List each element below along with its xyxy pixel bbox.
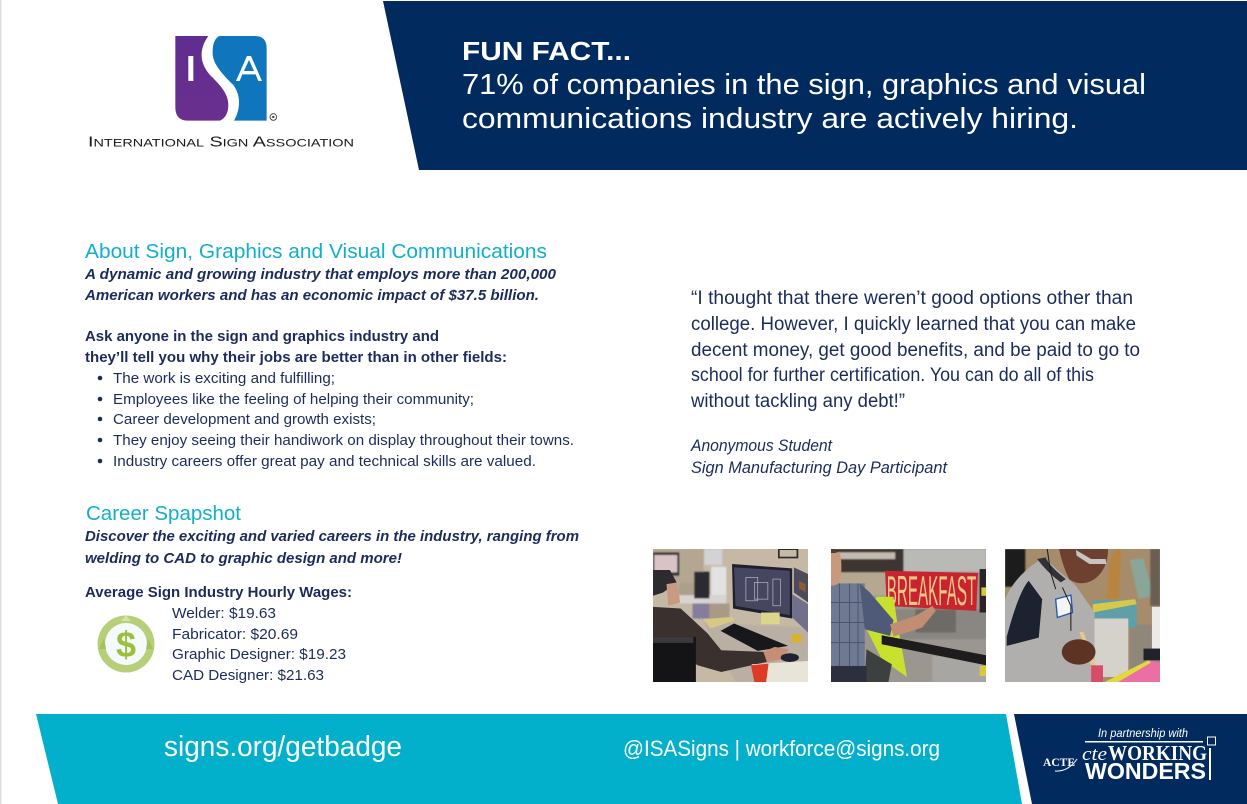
text: career intro (85, 528, 579, 567)
text: career intro: welding to CAD to graphic design and more! (85, 550, 402, 567)
heading: about the industry: About Sign, Graphics and Visual Communications (85, 240, 547, 263)
list: reasons jobs are better: Career development and growth exists; (113, 411, 376, 428)
panel: teal contact footer (36, 714, 1022, 804)
text: BREAKFAST (887, 567, 976, 614)
list: hourly wages by role: Graphic Designer: $19.23 (172, 646, 346, 663)
logo: CTE Working Wonders: WORKING (1108, 741, 1207, 765)
list: reasons jobs are better: Employees like the feeling of helping their community; (113, 391, 474, 408)
text: career intro: Discover the exciting and varied careers in the industry, ranging from (85, 528, 579, 545)
text: website link: signs.org/getbadge (164, 731, 402, 763)
logo: CTE Working Wonders: cte (1082, 744, 1107, 765)
text: ask anyone lead-in: they’ll tell you why their jobs are better than in other fields: (85, 349, 507, 366)
text: ask anyone lead-in (85, 328, 507, 366)
logo: ACTE: ACTE (1043, 755, 1075, 769)
icon: green dollar coin (98, 615, 154, 672)
icon: green dollar coin: $ (116, 624, 136, 665)
list: reasons jobs are better: The work is exciting and fulfilling; (113, 370, 335, 387)
text: fun fact statement (462, 69, 1146, 135)
list: hourly wages by role: Welder: $19.63 (172, 605, 276, 622)
list: hourly wages by role: CAD Designer: $21.63 (172, 667, 324, 684)
text: quote attribution (690, 437, 948, 477)
quote: student testimonial: college. However, I quickly learned that you can make (691, 314, 1136, 335)
logo: CTE Working Wonders (1082, 737, 1216, 784)
photo: neon breakfast sign (831, 549, 986, 682)
list: reasons jobs are better: Industry careers offer great pay and technical skills are valued. (113, 453, 536, 470)
list: reasons jobs are better (98, 370, 574, 470)
quote: student testimonial: without tackling any debt!” (690, 391, 905, 412)
list: reasons jobs are better: They enjoy seeing their handiwork on display throughout their towns. (113, 432, 574, 449)
text: quote attribution: Sign Manufacturing Day Participant (691, 459, 948, 477)
panel: fun fact banner (383, 1, 1247, 170)
quote: student testimonial: “I thought that there weren’t good options other than (691, 288, 1133, 309)
text: quote attribution: Anonymous Student (690, 437, 833, 455)
heading: career snapshot: Career Spapshot (86, 502, 241, 525)
logo: CTE Working Wonders: WONDERS (1085, 758, 1206, 784)
text: industry intro: American workers and has an economic impact of $37.5 billion. (84, 287, 539, 304)
text: fun fact statement: communications industry are actively hiring. (462, 103, 1078, 135)
text: industry intro: A dynamic and growing industry that employs more than 200,000 (84, 266, 557, 283)
text: in partnership with: In partnership with (1098, 726, 1188, 740)
logo: International Sign Association (88, 36, 354, 150)
text: ask anyone lead-in: Ask anyone in the sign and graphics industry and (85, 328, 439, 345)
photo: worker at CAD workstation (653, 549, 808, 682)
heading: fun fact: FUN FACT... (462, 36, 631, 66)
quote: student testimonial: decent money, get good benefits, and be paid to go to (691, 340, 1140, 361)
text: social handle and email: @ISASigns | workforce@signs.org (623, 736, 940, 761)
text: fun fact statement: 71% of companies in the sign, graphics and visual (462, 69, 1146, 101)
text: industry intro (84, 266, 557, 304)
quote: student testimonial: school for further certification. You can do all of this (691, 365, 1094, 386)
heading: hourly wages: Average Sign Industry Hourly Wages: (85, 584, 352, 601)
panel: partner footer (1014, 714, 1247, 804)
photo: student painting with brush (1005, 549, 1160, 682)
list: hourly wages by role (172, 605, 346, 684)
logo: International Sign Association: INTERNATIONAL S IGN A SSOCIATION (88, 134, 354, 150)
quote: student testimonial (690, 288, 1140, 412)
list: hourly wages by role: Fabricator: $20.69 (172, 626, 298, 643)
